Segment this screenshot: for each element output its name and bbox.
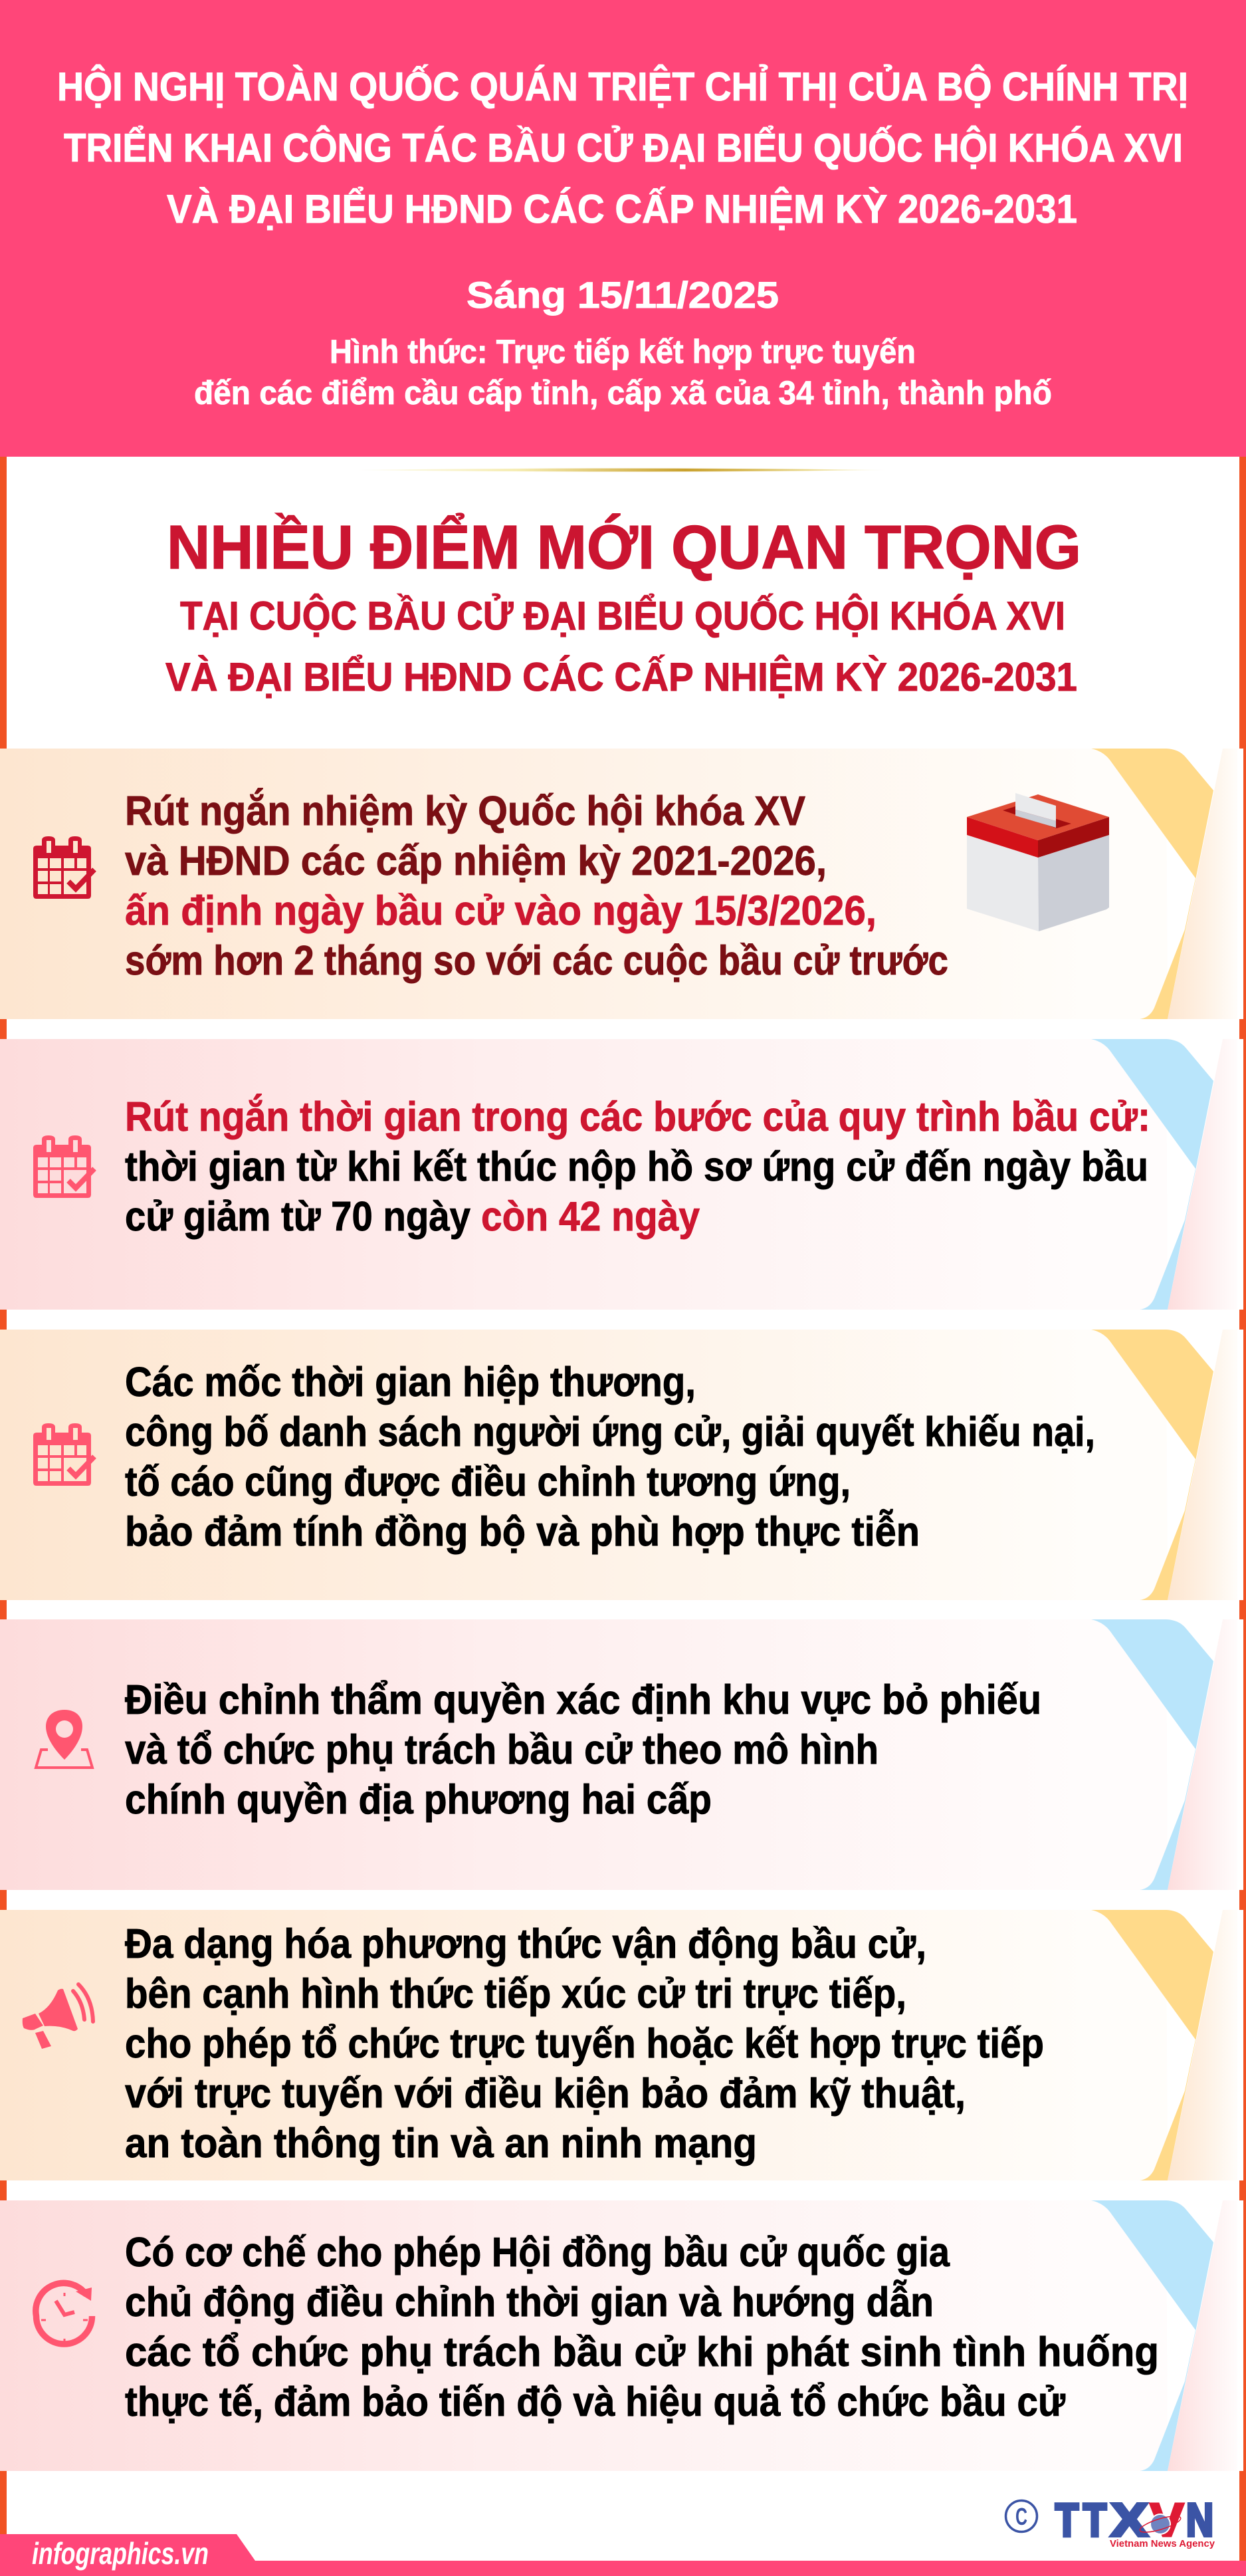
card text [125,1094,1150,1240]
logo: TTXVN: T [1083,2494,1106,2546]
gold divider [358,468,886,472]
source: infographics.vn: infographics.vn [32,2536,209,2571]
conference title: HỘI NGHỊ TOÀN QUỐC QUÁN TRIỆT CHỈ THỊ CỦA BỘ CHÍNH TRỊ [57,64,1188,109]
panel: card 2 shortened process [0,1039,1243,1310]
card text: Điều chỉnh thẩm quyền xác định khu vực bỏ phiếu [125,1677,1041,1723]
date: Sáng 15/11/2025 [467,274,779,316]
right orange border [1239,457,1246,2561]
icon: map pin [36,1710,92,1768]
card text: sớm hơn 2 tháng so với các cuộc bầu cử trước [125,938,948,984]
left orange border [0,457,7,2534]
card text: ấn định ngày bầu cử vào ngày 15/3/2026, [125,888,877,934]
logo: TTXVN: T [1055,2494,1079,2546]
format description: đến các điểm cầu cấp tỉnh, cấp xã của 34 tỉnh, thành phố [194,374,1052,411]
icon: calendar [33,836,94,899]
icon: ballot box [967,793,1109,931]
format description [194,333,1052,411]
card text: với trực tuyến với điều kiện bảo đảm kỹ thuật, [125,2071,966,2117]
main heading: NHIỀU ĐIỂM MỚI QUAN TRỌNG [167,513,1081,582]
card text: Rút ngắn thời gian trong các bước của quy trình bầu cử: [125,1094,1150,1140]
panel: card 1 shortened term [0,749,1243,1019]
logo: TTXVN: N [1186,2494,1213,2546]
card text: an toàn thông tin và an ninh mạng [125,2121,757,2166]
card text: bảo đảm tính đồng bộ và phù hợp thực tiễn [125,1509,920,1555]
card text: các tổ chức phụ trách bầu cử khi phát sinh tình huống [125,2329,1159,2375]
card text [125,2230,1159,2425]
card text: và HĐND các cấp nhiệm kỳ 2021-2026, [125,838,827,884]
icon: clock [36,2283,92,2344]
card text: cho phép tổ chức trực tuyến hoặc kết hợp trực tiếp [125,2021,1044,2067]
panel: card 5 campaigning methods [0,1910,1243,2180]
panel: card 6 flexible adjustment [0,2200,1243,2471]
conference title: VÀ ĐẠI BIỂU HĐND CÁC CẤP NHIỆM KỲ 2026-2031 [167,187,1077,231]
panel: card 4 voting area authority [0,1619,1243,1890]
logo: TTXVN: Vietnam News Agency [1110,2538,1215,2549]
logo: TTXVN: X [1111,2494,1148,2546]
icon: calendar [33,1423,94,1486]
main heading [165,513,1081,699]
card text [125,1359,1095,1555]
card text: Các mốc thời gian hiệp thương, [125,1359,696,1405]
card text [125,788,948,984]
card text: và tổ chức phụ trách bầu cử theo mô hình [125,1727,879,1773]
card text [125,1921,1044,2166]
card text: công bố danh sách người ứng cử, giải quyết khiếu nại, [125,1409,1095,1455]
main heading: VÀ ĐẠI BIỂU HĐND CÁC CẤP NHIỆM KỲ 2026-2031 [165,655,1077,699]
card text: thời gian từ khi kết thúc nộp hồ sơ ứng cử đến ngày bầu [125,1144,1148,1190]
card text: tố cáo cũng được điều chỉnh tương ứng, [125,1459,851,1505]
card text: Rút ngắn nhiệm kỳ Quốc hội khóa XV [125,788,805,834]
card text: còn 42 ngày [481,1194,700,1240]
footer bar [0,2534,1246,2576]
card text: thực tế, đảm bảo tiến độ và hiệu quả tổ chức bầu cử [125,2379,1065,2425]
icon: megaphone [23,1984,93,2049]
logo: TTXVN [1055,2494,1215,2549]
copyright symbol: C [1015,2503,1027,2530]
main heading: TẠI CUỘC BẦU CỬ ĐẠI BIỂU QUỐC HỘI KHÓA XVI [180,594,1065,638]
copyright symbol [1006,2501,1037,2531]
header band [0,0,1246,457]
icon: calendar [33,1135,94,1198]
card text: Đa dạng hóa phương thức vận động bầu cử, [125,1921,926,1967]
card text: bên cạnh hình thức tiếp xúc cử tri trực tiếp, [125,1971,906,2017]
logo: TTXVN: V [1150,2494,1184,2546]
conference title [57,64,1188,231]
card text: Có cơ chế cho phép Hội đồng bầu cử quốc gia [125,2230,950,2276]
card text: cử giảm từ 70 ngày [125,1194,470,1240]
card text: chính quyền địa phương hai cấp [125,1777,712,1823]
panel: card 3 timeline adjustments [0,1330,1243,1600]
format description: Hình thức: Trực tiếp kết hợp trực tuyến [330,333,916,370]
card text: chủ động điều chỉnh thời gian và hướng dẫn [125,2280,934,2325]
card text [125,1677,1041,1823]
